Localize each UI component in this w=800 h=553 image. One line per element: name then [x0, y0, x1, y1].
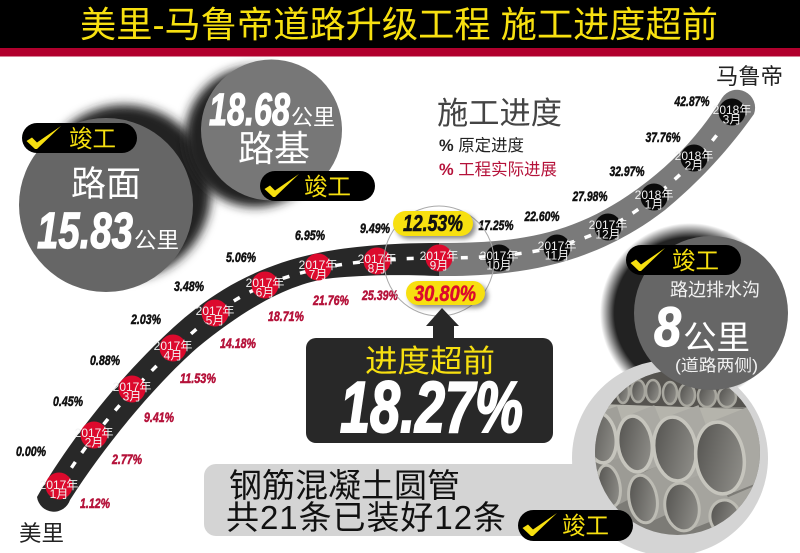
markers: month points: 7月 [309, 268, 327, 282]
title banner [0, 0, 800, 56]
pipes count text: 共21条已装好12条 [226, 499, 506, 536]
markers: month points: 2017年 [538, 239, 576, 253]
lower pipe row [595, 463, 765, 536]
panel: roadside drains [626, 236, 788, 390]
markers: month points: 2017年 [246, 276, 284, 290]
callout: current month comparison: 12.53% [403, 210, 463, 236]
values: planned progress: 5.06% [226, 250, 256, 265]
markers: month points: 3月 [123, 390, 141, 404]
markers: month points: 8月 [368, 262, 386, 276]
values: actual progress: 9.41% [144, 410, 174, 425]
values: actual progress: 18.71% [268, 309, 304, 324]
markers: month points: 2017年 [299, 258, 337, 272]
values: planned progress: 22.60% [524, 209, 560, 224]
road progress chart [16, 90, 755, 512]
markers: month points: 2017年 [40, 478, 78, 492]
panel: road surface completed: 竣工 [69, 126, 116, 153]
panel: roadside drains: 8 [654, 295, 682, 358]
values: actual progress: 21.76% [312, 293, 349, 308]
values: actual progress: 14.18% [220, 336, 256, 351]
label: Marudi: 马鲁帝 [716, 64, 783, 89]
values: planned progress: 0.00% [16, 444, 46, 459]
values: planned progress: 32.97% [610, 164, 644, 179]
arrow: up to comparison [426, 308, 459, 340]
markers: month points: 2017年 [113, 380, 151, 394]
values: planned progress: 9.49% [360, 221, 390, 236]
values: planned progress [16, 94, 710, 459]
markers: month points: 9月 [430, 258, 448, 272]
markers: month points: 2017年 [480, 249, 518, 263]
markers: month points: 6月 [256, 286, 274, 300]
callout: ahead of schedule: 18.27% [340, 368, 523, 448]
markers: month points: 2017年 [589, 218, 627, 232]
markers: month points: 5月 [206, 314, 224, 328]
markers: month points: 10月 [486, 258, 512, 272]
values: planned progress: 2.03% [130, 312, 161, 327]
markers: month points: 12月 [595, 228, 621, 242]
panel: roadbed completed: 公里 [291, 105, 335, 130]
panel: road surface completed: 路面 [71, 165, 141, 204]
markers: month points: 2017年 [420, 249, 458, 263]
callout: current month comparison: 30.80% [414, 281, 476, 306]
markers: month points: 2017年 [196, 304, 234, 318]
values: actual progress: 2.77% [111, 452, 142, 467]
grey ring [572, 360, 768, 553]
markers: month points: 2017年 [75, 426, 113, 440]
pipes text: 钢筋混凝土圆管 [229, 467, 460, 504]
markers: month points: 1月 [645, 198, 663, 212]
callout: ahead of schedule [306, 338, 553, 448]
road: completed section in black [37, 243, 439, 512]
values: actual progress [80, 288, 398, 511]
markers: month points: 2017年 [154, 339, 192, 353]
label: Miri: 美里 [19, 521, 64, 546]
values: planned progress: 37.76% [646, 130, 680, 145]
drain circle shadow [600, 223, 780, 403]
values: actual progress: 1.12% [80, 496, 110, 511]
panel: roadbed completed: 路基 [238, 128, 310, 169]
callout: ahead of schedule: 进度超前 [365, 344, 495, 379]
legend: construction progress: % 工程实际进展 [439, 160, 557, 179]
markers: month points: 2018年 [713, 103, 751, 117]
markers: month points: 3月 [723, 112, 741, 126]
panel: roadbed completed: 竣工 [304, 174, 351, 201]
panel: roadbed completed: 18.68 [209, 84, 290, 135]
values: actual progress: 25.39% [361, 288, 398, 303]
badge: pipes installed: 竣工 [562, 513, 609, 540]
markers: month points: 4月 [164, 348, 182, 362]
upper pipe row [583, 411, 765, 497]
markers: month points: 2018年 [635, 188, 673, 202]
panel: roadside drains: 竣工 [672, 248, 719, 275]
road: planned remainder in grey [439, 90, 755, 276]
markers: month points: 11月 [545, 248, 569, 262]
panel: road surface completed: 15.83 [37, 202, 133, 259]
markers: month points: 2月 [85, 436, 103, 450]
panel: roadside drains: 公里 [683, 319, 750, 356]
values: planned progress: 42.87% [674, 94, 710, 109]
panel: road surface completed: 公里 [134, 228, 179, 253]
markers: month points: 2017年 [358, 252, 396, 266]
panel: roadbed completed [201, 60, 375, 201]
legend: construction progress [437, 96, 562, 179]
panel: road surface completed [19, 67, 325, 292]
markers: month points: 2018年 [675, 149, 713, 163]
panel: concrete pipes [204, 223, 780, 553]
markers: month points: 1月 [50, 487, 68, 501]
badge: pipes installed [518, 510, 633, 541]
values: planned progress: 6.95% [295, 228, 325, 243]
values: planned progress: 17.25% [478, 218, 514, 233]
callout: current month comparison [384, 206, 494, 316]
road: centre dashes [62, 128, 722, 483]
panel: roadside drains: (道路两侧) [675, 356, 758, 375]
pipes text plate [204, 464, 604, 536]
values: planned progress: 27.98% [572, 189, 608, 204]
values: planned progress: 3.48% [174, 279, 204, 294]
legend: construction progress: % 原定进度 [439, 136, 524, 155]
values: actual progress: 11.53% [180, 371, 216, 386]
legend: construction progress: 施工进度 [437, 96, 562, 131]
photo: concrete pipes [595, 372, 760, 535]
markers: month points: 2月 [685, 158, 703, 172]
panel: roadside drains: 路边排水沟 [670, 280, 760, 300]
values: planned progress: 0.88% [90, 353, 120, 368]
markers: month points [40, 98, 751, 501]
values: planned progress: 0.45% [53, 394, 83, 409]
title banner: 美里-马鲁帝道路升级工程 施工进度超前 [80, 4, 718, 45]
